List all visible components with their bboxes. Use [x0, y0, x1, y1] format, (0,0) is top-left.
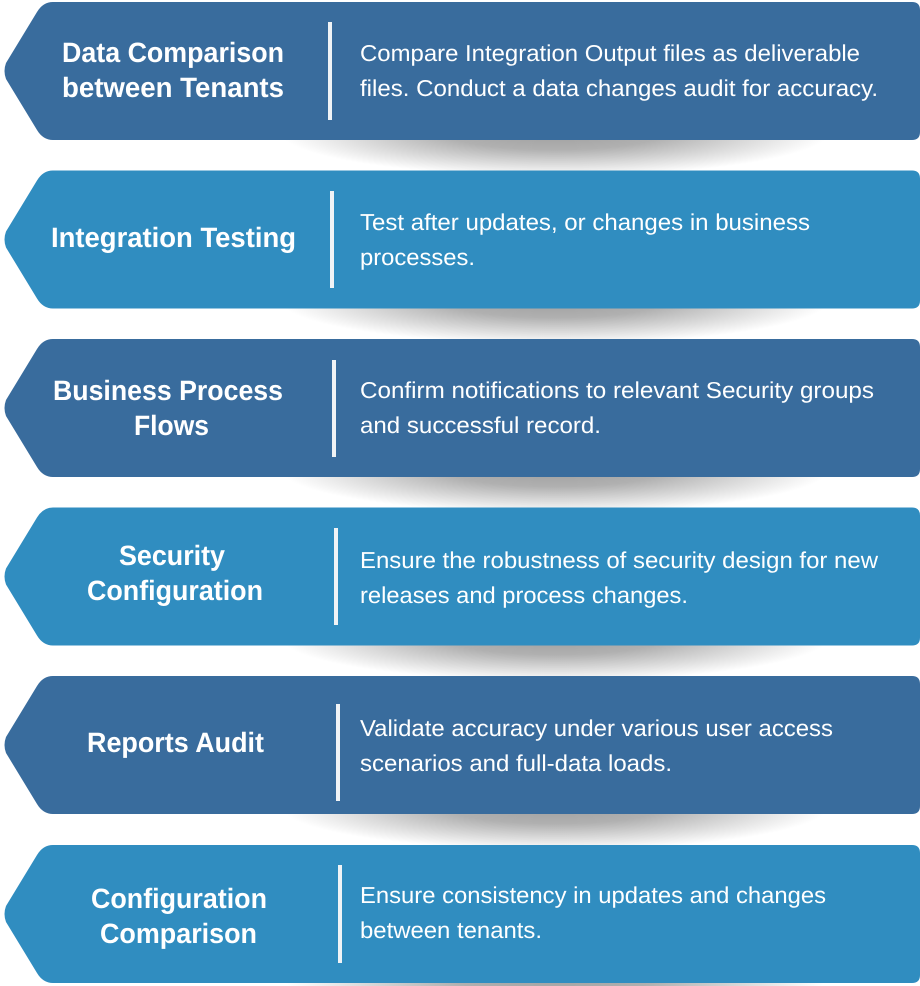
description: Ensure consistency in updates and changes	[360, 882, 826, 908]
heading: Data Comparison	[62, 37, 284, 68]
description: Ensure the robustness of security design for new	[360, 547, 878, 573]
description	[360, 547, 878, 608]
description: and successful record.	[360, 412, 601, 438]
divider	[330, 191, 334, 288]
divider	[334, 528, 338, 625]
heading: Reports Audit	[87, 727, 264, 758]
description: files. Conduct a data changes audit for accuracy.	[360, 75, 878, 101]
panel: Data Comparison between Tenants	[4, 2, 920, 140]
heading: Configuration	[87, 575, 263, 606]
description: Test after updates, or changes in business	[360, 209, 810, 235]
description	[360, 882, 826, 943]
heading	[62, 37, 284, 103]
panel: Configuration Comparison	[4, 845, 920, 983]
heading: between Tenants	[62, 72, 284, 103]
description: processes.	[360, 244, 475, 270]
arrow tab background	[4, 845, 920, 983]
divider	[338, 865, 342, 963]
heading	[87, 540, 263, 606]
arrow tab background	[4, 339, 920, 477]
heading: Integration Testing	[51, 222, 296, 253]
heading	[91, 883, 267, 949]
divider	[336, 704, 340, 801]
heading: Flows	[134, 410, 209, 441]
description: between tenants.	[360, 917, 542, 943]
drop shadows under rows	[280, 88, 830, 986]
heading: Security	[119, 540, 225, 571]
divider	[328, 22, 332, 120]
divider	[332, 360, 336, 457]
description: Compare Integration Output files as deliverable	[360, 40, 860, 66]
description: Confirm notifications to relevant Security groups	[360, 377, 874, 403]
description	[360, 377, 874, 438]
panel: Security Configuration	[4, 508, 920, 646]
panel: Integration Testing	[4, 170, 920, 308]
heading	[53, 375, 283, 441]
description	[360, 40, 878, 101]
description	[360, 715, 833, 776]
arrow tab background	[4, 508, 920, 646]
description: Validate accuracy under various user access	[360, 715, 833, 741]
arrow tab background	[4, 676, 920, 814]
heading: Configuration	[91, 883, 267, 914]
heading: Business Process	[53, 375, 283, 406]
arrow tab background	[4, 170, 920, 308]
heading: Comparison	[100, 918, 257, 949]
description: scenarios and full-data loads.	[360, 750, 672, 776]
panel: Reports Audit	[4, 676, 920, 814]
arrow tab background	[4, 2, 920, 140]
description	[360, 209, 810, 270]
description: releases and process changes.	[360, 582, 688, 608]
panel: Business Process Flows	[4, 339, 920, 477]
